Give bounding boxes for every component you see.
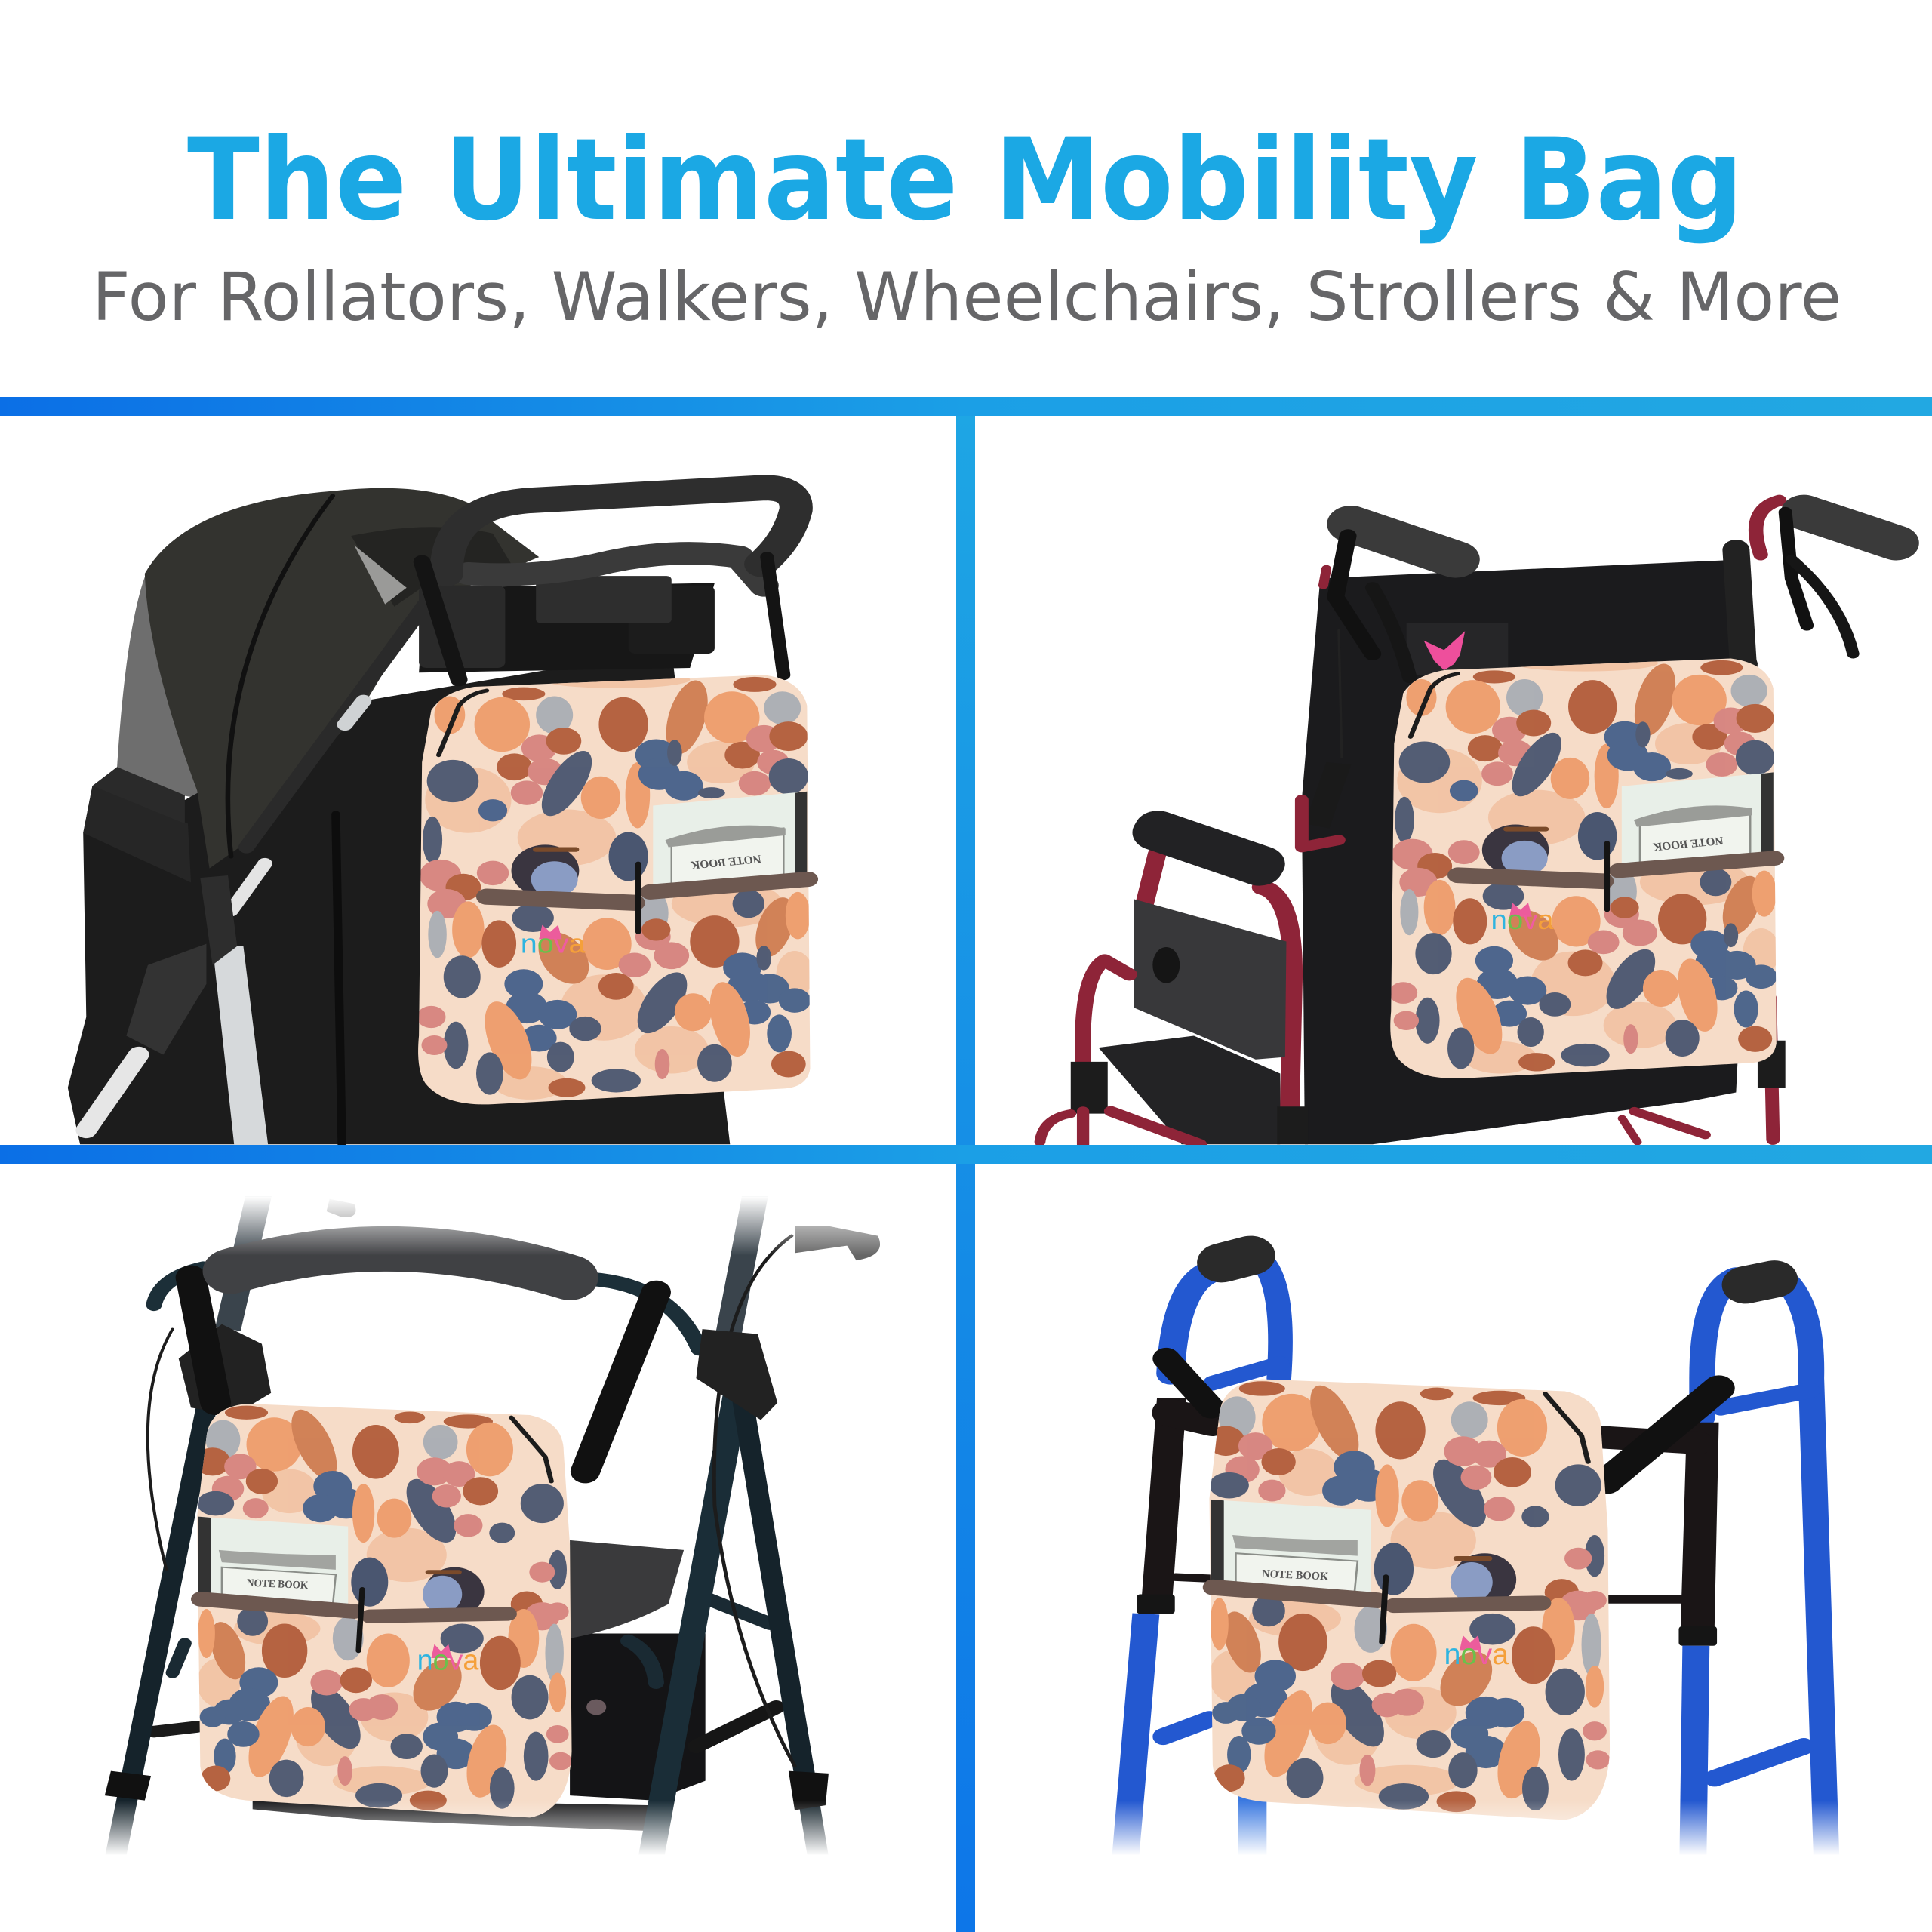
bag: [1207, 1380, 1610, 1820]
bag: [195, 1404, 572, 1817]
stroller frame: [68, 488, 730, 1144]
subtitle: For Rollators, Walkers, Wheelchairs, Strollers & More: [92, 258, 1841, 336]
book label: NOTE BOOK: [1652, 835, 1724, 854]
dividers: [0, 397, 1932, 1932]
fade: bottom: [1028, 1801, 1890, 1884]
title: The Ultimate Mobility Bag: [187, 115, 1743, 246]
panel: wheelchair with bag: [1040, 500, 1897, 1144]
book label: NOTE BOOK: [246, 1577, 309, 1592]
armrest: [1125, 805, 1293, 891]
panel: rollator with bag: [62, 1162, 924, 1884]
brand logo: nova: [417, 1644, 478, 1676]
brand logo: nova: [1491, 905, 1554, 935]
panel: folding walker with bag: [1028, 1256, 1890, 1884]
walker frame: [1125, 1256, 1826, 1864]
bag: [1389, 655, 1780, 1078]
panel: stroller with bag: [68, 488, 814, 1144]
bag: [417, 671, 814, 1104]
wheelchair frame: [1040, 500, 1897, 1144]
handle and cup holders: [419, 488, 796, 680]
rollator frame: [105, 1182, 880, 1864]
handle pad: [231, 1249, 570, 1278]
brand logo: nova: [1444, 1638, 1509, 1671]
icon: butterfly tag: [1424, 631, 1465, 670]
brand logo: nova: [521, 928, 586, 958]
fade: top and bottom: [62, 1162, 924, 1884]
book label: NOTE BOOK: [1262, 1567, 1329, 1583]
book label: NOTE BOOK: [690, 853, 762, 872]
